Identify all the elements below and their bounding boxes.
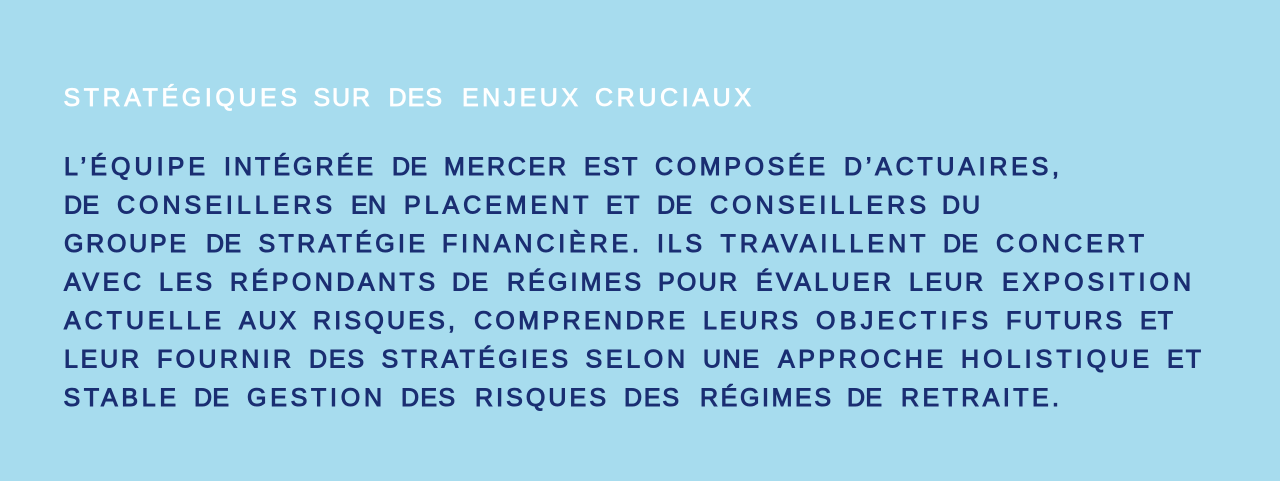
body text: FINANCIÈRE.: [442, 229, 639, 258]
body text: STABLE: [64, 384, 176, 412]
heading: ENJEUX: [462, 84, 578, 112]
body text: STRATÉGIES: [382, 344, 568, 374]
body text: POUR: [658, 268, 737, 296]
body text: RÉGIMES: [507, 268, 641, 296]
body text: STRATÉGIE: [258, 229, 425, 258]
body text: EST: [584, 153, 637, 181]
body text: EXPOSITION: [1002, 268, 1191, 296]
body text: AVEC: [64, 268, 141, 296]
body text: COMPOSÉE: [655, 152, 825, 181]
body text: HOLISTIQUE: [961, 346, 1149, 374]
heading: SUR: [314, 84, 370, 112]
body text: ET: [606, 192, 639, 220]
body text: ET: [1140, 307, 1173, 335]
body text: EN: [351, 192, 386, 220]
body text: DES: [624, 384, 679, 412]
body text: GESTION: [247, 384, 382, 412]
body text: INTÉGRÉE: [224, 152, 373, 181]
body text: DE: [194, 384, 229, 412]
body text: RETRAITE.: [901, 384, 1059, 412]
body text: PLACEMENT: [404, 192, 588, 220]
heading: DES: [388, 84, 442, 112]
body text: DU: [942, 192, 980, 220]
body text: MERCER: [444, 153, 566, 181]
body text: RISQUES: [475, 384, 606, 412]
body text: ACTUELLE: [64, 307, 221, 335]
body text: [64, 152, 1201, 412]
body text: DES: [401, 384, 455, 412]
body text: D’ACTUAIRES,: [844, 153, 1059, 181]
body text: DE: [657, 192, 692, 220]
body text: LEUR: [909, 268, 983, 296]
body text: CONCERT: [996, 230, 1144, 258]
body text: OBJECTIFS: [816, 307, 988, 335]
body text: SELON: [586, 346, 685, 374]
body text: GROUPE: [64, 230, 186, 258]
body text: ILS: [657, 230, 702, 258]
body text: DE: [452, 268, 488, 296]
body text: LES: [159, 268, 212, 296]
body text: CONSEILLERS: [710, 192, 926, 220]
body text: APPROCHE: [778, 346, 943, 374]
heading: STRATÉGIQUES: [64, 83, 297, 112]
body text: TRAVAILLENT: [720, 230, 925, 258]
body text: AUX: [239, 307, 296, 335]
body text: ÉVALUER: [756, 268, 891, 296]
body text: DE: [392, 153, 427, 181]
body text: LEUR: [64, 346, 139, 374]
body text: DE: [847, 384, 882, 412]
body text: RISQUES,: [313, 307, 455, 335]
body text: DE: [206, 230, 241, 258]
body text: FOURNIR: [157, 346, 291, 374]
body text: DE: [64, 192, 99, 220]
heading: CRUCIAUX: [595, 84, 751, 112]
body text: DES: [309, 346, 364, 374]
body text: COMPRENDRE: [474, 307, 685, 335]
body text: L’ÉQUIPE: [64, 152, 205, 181]
body text: UNE: [703, 346, 759, 374]
body text: CONSEILLERS: [117, 192, 332, 220]
body text: RÉGIMES: [700, 383, 831, 412]
body text: ET: [1167, 346, 1201, 374]
body text: DE: [943, 230, 978, 258]
body text: LEURS: [703, 307, 798, 335]
body text: FUTURS: [1006, 307, 1122, 335]
body text: RÉPONDANTS: [230, 268, 435, 296]
